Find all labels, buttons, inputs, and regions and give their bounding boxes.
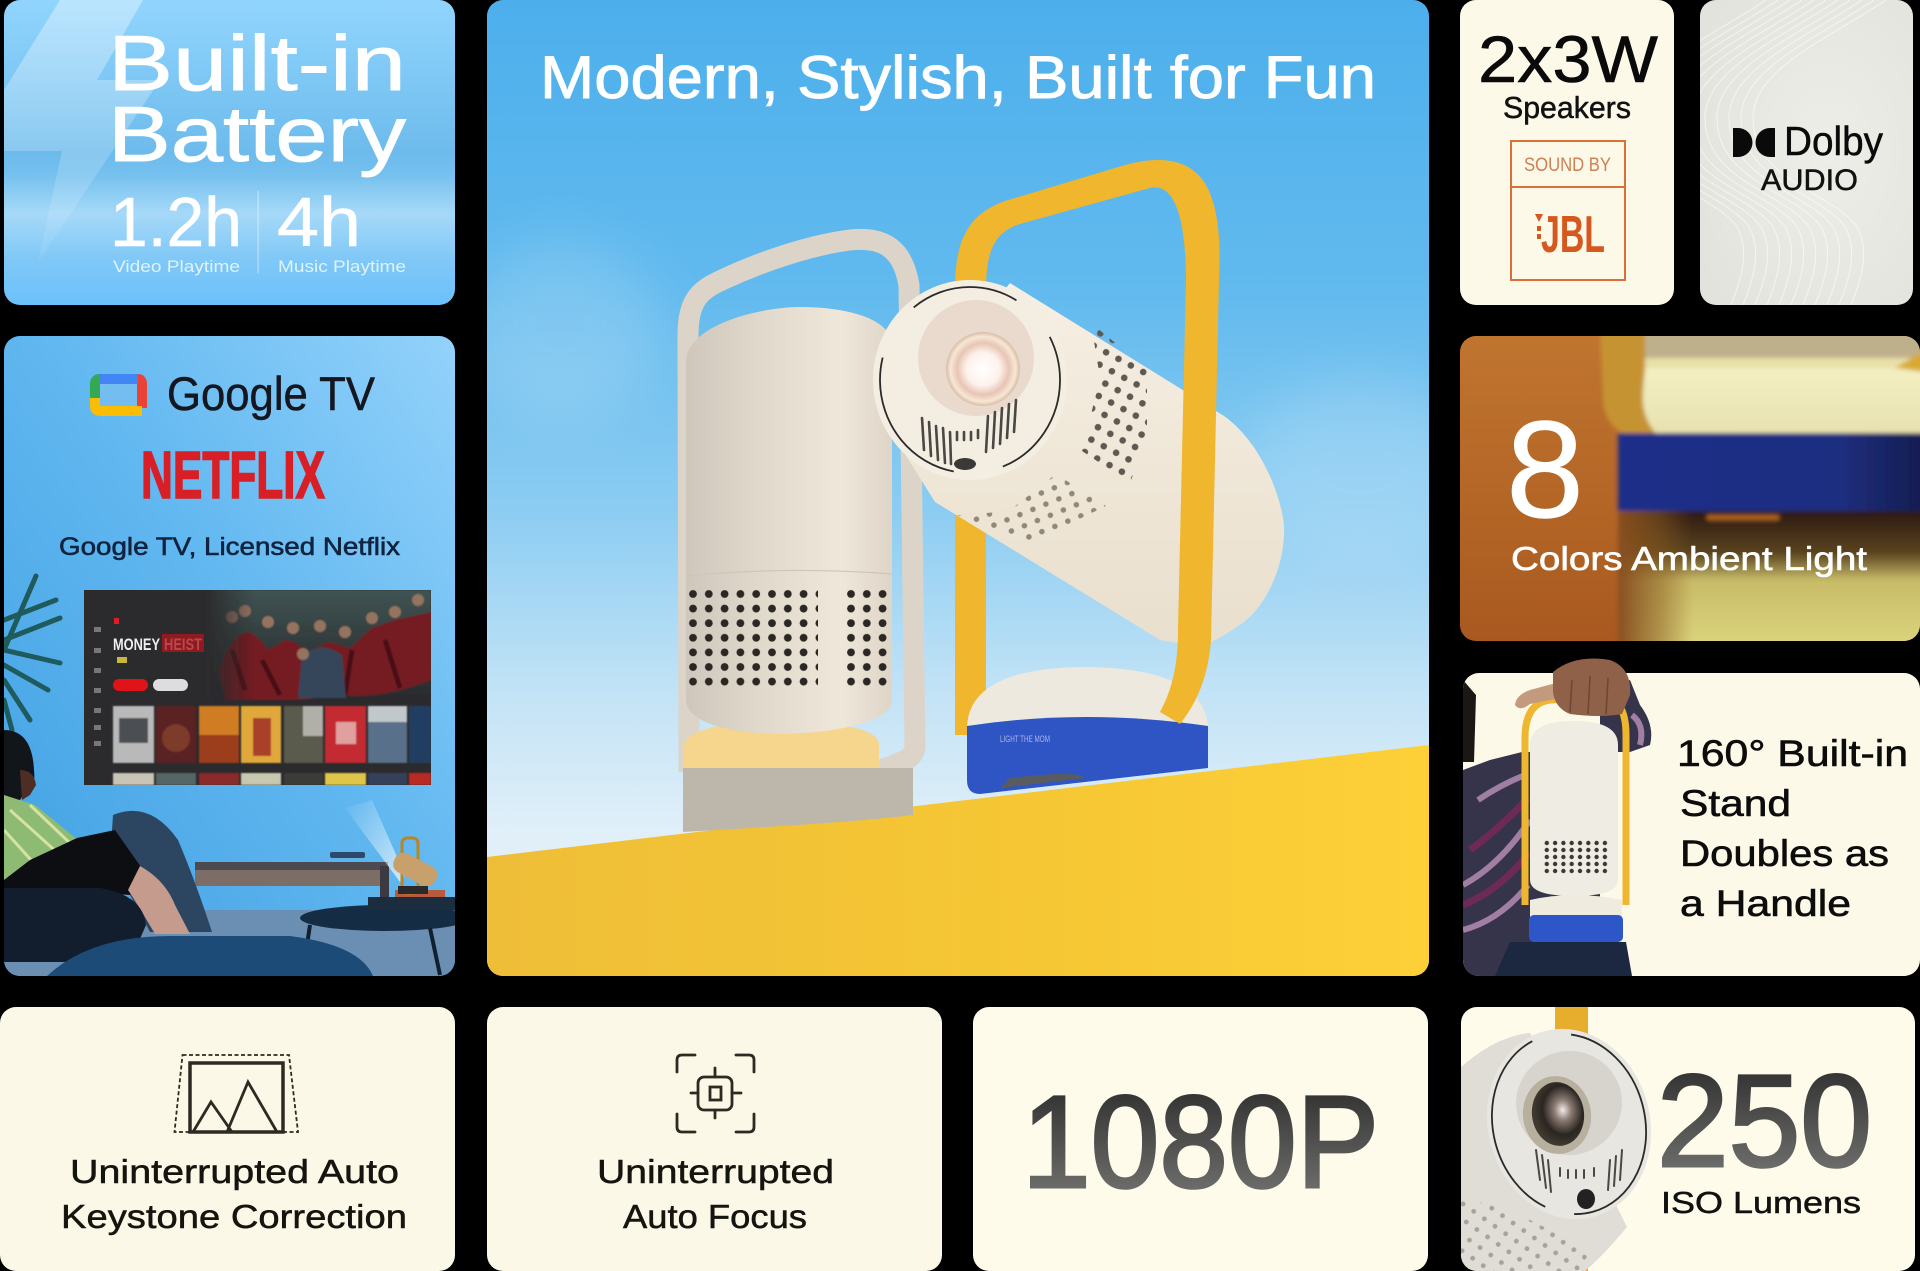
jbl logo: JBL <box>1541 206 1605 264</box>
light beam from projector <box>345 800 405 882</box>
label: speakers: Speakers <box>1503 90 1631 125</box>
reflection <box>1618 511 1920 650</box>
jbl badge <box>1511 141 1625 280</box>
yellow handle close-up <box>1600 330 1920 440</box>
icon: google tv logo <box>95 379 142 411</box>
text: uninterrupted auto focus: Auto Focus <box>623 1198 807 1235</box>
base disc <box>967 667 1208 794</box>
stat: 8: 8 <box>1506 393 1584 547</box>
handheld projector <box>1515 658 1630 942</box>
caption: google tv licensed netflix: Google TV, Licensed Netflix <box>59 533 401 561</box>
panel: auto focus <box>487 1007 942 1271</box>
logo text: audio: AUDIO <box>1761 164 1858 197</box>
label: video playtime: Video Playtime <box>113 257 240 276</box>
panel: google tv and netflix <box>4 336 470 976</box>
lens ring <box>1518 1072 1596 1158</box>
label: iso lumens: ISO Lumens <box>1661 1185 1861 1220</box>
yellow handle strip <box>1555 1007 1588 1271</box>
text: uninterrupted auto focus <box>597 1153 834 1235</box>
lens <box>946 332 1020 406</box>
sound by: SOUND BY <box>1524 155 1611 176</box>
text: 160 built-in stand: Doubles as <box>1680 833 1889 874</box>
lens housing <box>918 300 1034 416</box>
beige projector upright <box>683 239 915 832</box>
vents <box>922 400 1016 464</box>
text: 160 built-in stand: 160° Built-in <box>1677 733 1908 774</box>
beige handle <box>688 239 915 772</box>
my list button <box>153 679 188 691</box>
lamp glow <box>1643 368 1920 440</box>
yellow ledge <box>487 745 1429 976</box>
button <box>954 458 976 470</box>
label: colors ambient light: Colors Ambient Light <box>1511 540 1867 577</box>
icon: keystone frame <box>174 1055 298 1132</box>
projected netflix screen <box>84 590 431 785</box>
heading: built-in: Built-in <box>108 19 406 107</box>
panel: stand handle <box>1463 658 1920 976</box>
label: music playtime: Music Playtime <box>278 257 406 276</box>
yellow handle front leg <box>1160 170 1219 724</box>
handle tip on right <box>1895 350 1920 372</box>
panel: main hero <box>460 0 1480 976</box>
panel: auto keystone <box>0 1007 455 1271</box>
text: uninterrupted auto focus: Uninterrupted <box>597 1153 834 1190</box>
heading: battery: Battery <box>108 90 406 178</box>
grille bottom <box>952 474 1106 543</box>
plant <box>4 576 60 730</box>
person jeans <box>1495 942 1632 976</box>
base <box>1530 895 1622 917</box>
netflix mini logo <box>114 618 119 624</box>
hero image: cast in red <box>205 590 431 700</box>
jbl logo mark <box>1535 214 1543 239</box>
text: uninterrupted auto keystone correction <box>61 1153 407 1235</box>
person hair <box>1463 680 1476 762</box>
blue ring close-up <box>1618 433 1920 511</box>
text: 160 built-in stand: a Handle <box>1680 883 1851 924</box>
panel: 250 iso lumens <box>1461 1007 1915 1271</box>
thumb <box>1515 683 1560 708</box>
living room bench <box>195 852 389 897</box>
base shadow <box>1000 774 1085 788</box>
thumbnail rows <box>113 706 431 785</box>
person sweater <box>1463 680 1651 976</box>
yellow handle behind <box>955 160 1219 735</box>
panel: dolby audio <box>1633 0 1913 305</box>
top strip <box>1645 330 1920 358</box>
button <box>1577 1189 1595 1209</box>
stat: video playtime value: 1.2h <box>110 183 242 261</box>
glow ring <box>684 726 879 768</box>
heading: modern stylish built for fun: Modern, Stylish, Built for Fun <box>540 44 1376 111</box>
text: uninterrupted auto keystone correction: Keystone Correction <box>61 1198 407 1235</box>
text: 160 built-in stand: Stand <box>1680 783 1791 824</box>
icon: dolby double d <box>1733 128 1775 157</box>
icon: lightning bolt watermark <box>4 0 160 262</box>
text: 160 built-in stand <box>1677 733 1908 924</box>
floor <box>4 910 455 976</box>
tag <box>117 657 127 663</box>
tilted cylinder <box>890 283 1284 646</box>
heist backing <box>162 634 204 652</box>
sidebar icons <box>94 627 101 746</box>
speaker grille <box>688 587 818 691</box>
grille <box>1461 1200 1590 1271</box>
title: heist: HEIST <box>164 635 202 654</box>
panel: ambient light <box>1460 330 1920 651</box>
logo text: google tv: Google TV <box>167 367 376 420</box>
face <box>1466 1010 1672 1238</box>
body <box>1461 1033 1627 1271</box>
small projector on table <box>390 838 440 894</box>
viewer on sofa <box>4 730 373 976</box>
grille top <box>1082 323 1147 483</box>
projector face <box>873 280 1067 480</box>
grey base <box>683 768 913 832</box>
lens <box>1528 1079 1588 1149</box>
tilted projector <box>873 280 1284 646</box>
panel: speakers <box>1460 0 1674 305</box>
beige cylinder <box>686 307 892 734</box>
heading: 2x3w: 2x3W <box>1478 22 1659 96</box>
body <box>1530 721 1618 896</box>
yellow handle <box>1525 698 1626 905</box>
panel: built-in battery <box>4 0 455 305</box>
play button <box>113 679 148 691</box>
stat: music playtime value: 4h <box>277 183 361 261</box>
text: uninterrupted auto keystone correction: Uninterrupted Auto <box>70 1153 399 1190</box>
icon: focus reticle <box>677 1055 754 1132</box>
logo text: netflix: NETFLIX <box>141 438 325 513</box>
small base lettering: LIGHT THE MOM <box>1000 734 1050 744</box>
stat: 250: 250 <box>1657 1047 1872 1194</box>
vents <box>1536 1150 1622 1192</box>
stat: 1080p: 1080P <box>1022 1068 1379 1215</box>
clouds <box>460 240 1480 560</box>
fist <box>1553 658 1630 716</box>
title: money heist: MONEY <box>113 635 160 654</box>
lens housing <box>1504 1039 1634 1167</box>
logo text: dolby: Dolby <box>1784 118 1883 164</box>
projector close-up <box>1461 1010 1672 1271</box>
panel: 1080p <box>973 1007 1428 1271</box>
side table <box>300 890 470 975</box>
speaker grille right <box>844 587 891 691</box>
grille <box>1542 839 1610 875</box>
